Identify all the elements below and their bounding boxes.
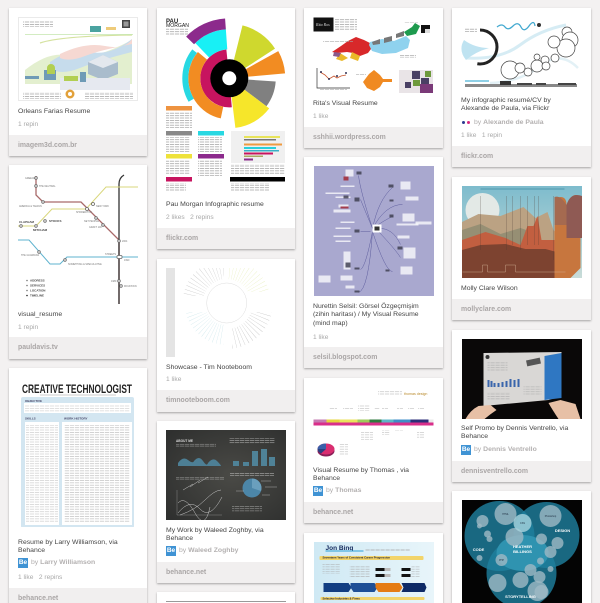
card: Alexandre de Paula: by Alexande de Paula — [474, 118, 544, 126]
source: dennisventrello.com — [461, 468, 528, 475]
title: My infographic resumé/CV by — [461, 96, 551, 104]
thumbnail: dark infographic: ABOUT ME — [176, 439, 193, 443]
thumbnail: rainbow timeline: thomas design — [404, 392, 427, 396]
title: Behance — [461, 433, 488, 440]
thumbnail: Jon Bing resume — [314, 542, 434, 603]
thumbnail: Larry Williamson resume: WORK HISTORY — [64, 416, 88, 420]
source — [304, 347, 443, 368]
author — [313, 486, 362, 496]
source — [452, 146, 591, 167]
title: Alexande de Paula, via Flickr — [461, 105, 549, 112]
title — [461, 424, 568, 440]
thumbnail: venn diagram: Photoshop — [544, 515, 556, 518]
source: behance.net — [166, 569, 206, 576]
thumbnail: metro map resume: SERVICES — [30, 284, 45, 288]
stats: 1 like — [313, 334, 328, 340]
stats: 1 like 1 repin — [461, 132, 502, 138]
card: bottom stub in column two — [157, 592, 295, 603]
thumbnail: radial timeline — [166, 268, 271, 357]
source — [157, 228, 295, 249]
source — [157, 562, 295, 583]
title: visual_resume — [18, 310, 62, 318]
card: Visual Resume by Thomas: Be — [314, 487, 322, 494]
card: Dennis Ventrello: Be — [462, 446, 470, 453]
stats: 1 repin — [18, 120, 38, 128]
thumbnail: metro map resume: AMERICA & TAIWAN — [19, 205, 42, 208]
thumbnail: Rita's chart collage — [314, 18, 433, 93]
thumbnail: metro map resume: MITCHAM — [33, 228, 48, 232]
card: Creative Technologist resume — [9, 368, 147, 603]
card: Showcase — [157, 259, 295, 412]
title: Behance — [313, 475, 340, 482]
card: Nurettin Selsil mind map — [304, 157, 443, 368]
stats: 1 like — [313, 112, 328, 120]
stats: 2 likes 2 repins — [166, 214, 214, 220]
thumbnail: metro map resume: STOCKS — [49, 219, 61, 223]
author — [461, 445, 537, 455]
thumbnail: metro map resume: NET PEOPLE — [84, 220, 99, 223]
thumbnail: metro map resume: NEW YORK — [96, 205, 109, 208]
source: pauldavis.tv — [18, 344, 58, 351]
card: Dennis Ventrello — [452, 330, 591, 482]
thumbnail: purple mind map — [314, 166, 434, 296]
author — [166, 546, 238, 556]
thumbnail: venn diagram: HTML — [502, 513, 509, 516]
card: Alexandre de Paula — [452, 8, 591, 167]
thumbnail: metro map resume: ADDRESS — [30, 278, 45, 282]
thumbnail: metro map resume: 1990 — [124, 259, 130, 262]
card: Dennis Ventrello: by Dennis Ventrello — [474, 446, 537, 453]
card: Jon Bing — [304, 533, 443, 603]
source: timnooteboom.com — [166, 397, 230, 404]
thumbnail: metro map resume: GREECE — [25, 177, 36, 180]
thumbnail: metro map resume: MOUNTAIN — [124, 285, 137, 288]
thumbnail: Pau Morgan sunburst: MORGAN — [166, 23, 189, 29]
card: Creative Technologist resume: by Larry Williamson — [31, 559, 95, 566]
thumbnail: venn diagram: CODE — [472, 547, 484, 552]
source: imagem3d.com.br — [18, 142, 77, 149]
thumbnail: venn diagram: PHP — [499, 559, 504, 562]
title — [166, 526, 264, 542]
source — [9, 337, 147, 359]
card: Pau Morgan — [157, 8, 295, 249]
thumbnail: metro map resume: STREETS — [105, 253, 116, 256]
thumbnail: venn diagram — [462, 500, 582, 603]
thumbnail: metro map resume: LOCATION — [30, 288, 45, 292]
title: Pau Morgan Infographic resume — [166, 200, 264, 208]
thumbnail: metro map resume: THE GUARDIAN — [21, 254, 39, 257]
thumbnail: venn diagram: BILLINGS — [513, 549, 532, 554]
thumbnail: dark infographic — [166, 430, 286, 520]
title: Self Promo by Dennis Ventrello, via — [461, 424, 568, 432]
card: Creative Technologist resume: Be — [19, 559, 27, 566]
card: Heather Billings — [452, 491, 591, 603]
card: Waleed Zoghby: by Waleed Zoghby — [179, 547, 238, 554]
card: Waleed Zoghby — [157, 421, 295, 583]
title: Behance — [166, 535, 193, 542]
thumbnail: metro map resume: 1989 — [111, 280, 117, 283]
thumbnail: venn diagram: CSS — [520, 522, 525, 525]
source — [157, 390, 295, 412]
thumbnail: Pau Morgan sunburst: PAU — [166, 19, 178, 25]
thumbnail: rainbow timeline — [314, 391, 434, 456]
title — [313, 466, 409, 482]
thumbnail: metro map resume: THE NEUTRAL — [39, 185, 56, 188]
title — [461, 96, 551, 112]
card: Rita's Visual Resume — [304, 8, 443, 148]
card: Molly Clare Wilson — [452, 177, 591, 320]
thumbnail: Jon Bing resume: Seventeen Years of Consistent Career Progression — [322, 556, 390, 560]
stats: 1 like — [166, 376, 181, 383]
title — [18, 538, 118, 554]
source — [304, 127, 443, 148]
title: Resume by Larry Williamson, via — [18, 538, 118, 546]
stats: 1 repin — [18, 324, 38, 330]
title: Nurettin Selsil: Görsel Özgeçmişim — [313, 302, 419, 310]
title: Behance — [18, 547, 45, 554]
card: Visual Resume by Thomas: by Thomas — [326, 487, 361, 494]
source — [9, 135, 147, 156]
title: Showcase - Tim Nooteboom — [166, 364, 252, 370]
source — [304, 502, 443, 523]
source: sshhii.wordpress.com — [313, 134, 386, 141]
source: selsil.blogspot.com — [313, 354, 377, 361]
title: Visual Resume by Thomas , via — [313, 466, 409, 474]
source: behance.net — [18, 595, 58, 602]
thumbnail: Jon Bing resume: Selective Industries & Firms — [322, 596, 360, 600]
thumbnail: Orleans resume chart — [18, 17, 138, 101]
thumbnail: metro map resume: SOMETHING & SPECULATIVE — [68, 263, 102, 266]
thumbnail: held brochure photo — [462, 339, 582, 419]
card: Orleans Farias Resume — [9, 8, 147, 156]
thumbnail: metro map resume: GRAFT 100 — [89, 226, 102, 229]
thumbnail: Pau Morgan sunburst — [166, 18, 286, 190]
source — [9, 588, 147, 603]
thumbnail: metro map resume: SHOREDITCH — [76, 211, 92, 214]
source: behance.net — [313, 509, 353, 516]
title: (mind map) — [313, 320, 348, 327]
thumbnail: Rita's chart collage: Rita Ros — [315, 22, 330, 27]
thumbnail: metro map resume: 2004 — [122, 240, 128, 243]
thumbnail: venn diagram: STORYTELLING — [505, 594, 535, 599]
source: flickr.com — [461, 153, 493, 160]
thumbnail: cropped image — [166, 601, 286, 602]
stats: 1 like 2 repins — [18, 574, 62, 580]
source — [452, 461, 591, 482]
source: flickr.com — [166, 235, 198, 242]
thumbnail: venn diagram: DESIGN — [554, 528, 570, 533]
thumbnail: metro map resume: CLAPHAM — [19, 220, 34, 224]
title: Molly Clare Wilson — [461, 284, 518, 292]
thumbnail: metro map resume — [18, 174, 138, 304]
thumbnail: mountain landscape chart — [462, 186, 582, 278]
title — [313, 302, 419, 327]
thumbnail: metro map resume: TIMELINE — [30, 294, 44, 298]
thumbnail: Larry Williamson resume — [21, 384, 134, 527]
source — [452, 299, 591, 320]
title: Orleans Farias Resume — [18, 108, 90, 114]
title: My Work by Waleed Zoghby, via — [166, 526, 264, 534]
source: mollyclare.com — [461, 306, 511, 313]
card: Visual Resume by Thomas — [304, 378, 443, 523]
thumbnail: Jon Bing resume: Jon Bing — [325, 545, 353, 552]
author — [18, 558, 95, 568]
thumbnail: venn diagram: HEATHER — [512, 544, 532, 549]
card: visual_resume — [9, 165, 147, 359]
thumbnail: Larry Williamson resume: OBJECTIVE — [25, 399, 42, 403]
thumbnail: Larry Williamson resume: SKILLS — [25, 416, 36, 420]
card: Waleed Zoghby: Be — [167, 547, 175, 554]
thumbnail: circles infographic — [462, 22, 579, 87]
title: Rita's Visual Resume — [313, 100, 378, 106]
title: (zihin haritası) / My Visual Resume — [313, 311, 419, 318]
